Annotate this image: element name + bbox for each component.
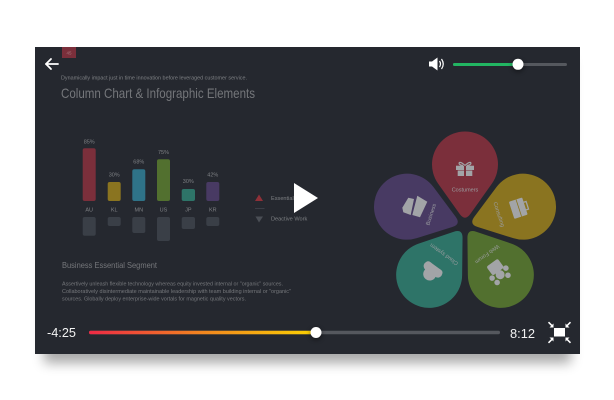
bar: KL bbox=[108, 172, 121, 226]
body paragraph: sources. Globally deploy enterprise-wide vortals for magnetic quality vectors. bbox=[62, 296, 246, 302]
bar: MN: 68% bbox=[133, 160, 144, 166]
legend bbox=[255, 194, 308, 222]
icon: volume bbox=[429, 58, 443, 70]
bar: US: US bbox=[160, 208, 168, 214]
volume slider bbox=[453, 59, 567, 72]
petal: cloud system: Cloud system bbox=[429, 241, 460, 266]
petal: web forum bbox=[443, 212, 547, 321]
bar: KR bbox=[206, 172, 219, 226]
petal: cloud system bbox=[383, 212, 487, 321]
bar: JP bbox=[182, 179, 195, 229]
progress bar bbox=[89, 327, 500, 340]
bar: MN: MN bbox=[135, 208, 143, 214]
page number tag: 45 bbox=[66, 50, 72, 56]
petal: consulting: Consulting bbox=[491, 201, 505, 228]
player panel bbox=[35, 47, 580, 354]
bar: KR: KR bbox=[209, 208, 217, 214]
bar: KR: 42% bbox=[207, 172, 218, 178]
bar: US bbox=[157, 150, 170, 241]
bar: KL: 30% bbox=[109, 172, 120, 178]
title: Column Chart & Infographic Elements bbox=[61, 85, 255, 101]
bar: KL: KL bbox=[111, 208, 118, 214]
bar: JP: 30% bbox=[183, 179, 194, 185]
legend: essential work: Essential Work bbox=[271, 196, 308, 202]
petal diagram bbox=[365, 131, 565, 321]
petal: consumers bbox=[432, 131, 498, 218]
bar: JP: JP bbox=[185, 208, 192, 214]
bar: MN bbox=[132, 160, 145, 233]
bar: AU bbox=[83, 140, 96, 236]
body paragraph: Assertively unleash flexible technology whereas equity invested internal or "organic" sources. bbox=[62, 282, 283, 288]
page number tag bbox=[62, 47, 76, 58]
elapsed time: -4:25 bbox=[47, 326, 76, 340]
body paragraph: Collaboratively disintermediate maintainable leadership with team building internal or "organic" bbox=[62, 289, 291, 295]
bar: US: 75% bbox=[158, 150, 169, 156]
total time: 8:12 bbox=[510, 327, 535, 341]
bar: AU: 85% bbox=[84, 140, 95, 146]
body heading: Business Essential Segment bbox=[62, 261, 158, 270]
panel shadow bbox=[44, 60, 571, 363]
bar: AU: AU bbox=[85, 208, 93, 214]
subtitle: Dynamically impact just in time innovation before leveraged customer service. bbox=[61, 76, 247, 82]
petal: web forum: Web Forum bbox=[473, 243, 500, 265]
petal: consumers: Costumers bbox=[452, 188, 479, 194]
petal: consulting bbox=[462, 165, 565, 254]
icon: fullscreen bbox=[548, 322, 570, 343]
icon: back arrow bbox=[46, 59, 58, 69]
petal: business: Business bbox=[425, 203, 438, 226]
icon: play button bbox=[294, 183, 318, 213]
body paragraph bbox=[62, 282, 291, 302]
petal: business bbox=[365, 165, 468, 254]
legend: deactive work: Deactive Work bbox=[271, 216, 307, 222]
column chart bbox=[83, 140, 219, 241]
